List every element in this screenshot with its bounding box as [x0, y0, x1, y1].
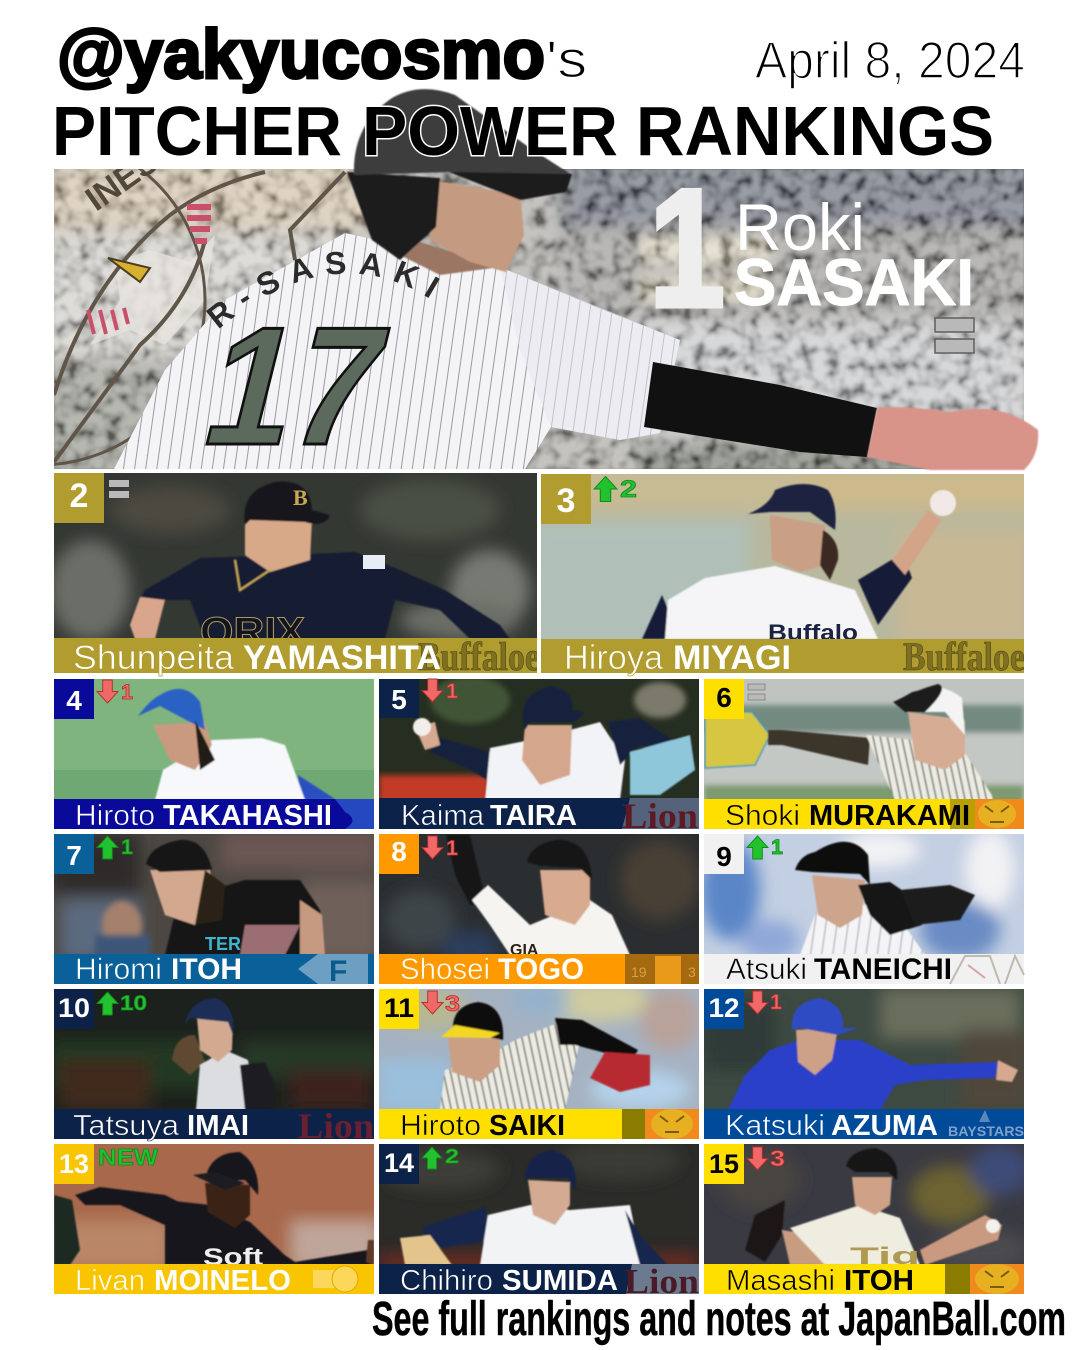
player name: Livan [75, 1265, 145, 1297]
rank change: down 3: 3 [445, 991, 460, 1016]
Marines logo [90, 235, 215, 345]
rank badge [704, 679, 744, 719]
hero photo [54, 142, 1024, 480]
photo: Buffalo [768, 620, 858, 645]
card: rank 6 Shoki Murakami [704, 679, 1024, 832]
photo [54, 1144, 374, 1271]
caption bar [54, 638, 537, 673]
rank change: unchanged [935, 318, 974, 353]
rank badge: 9 [716, 841, 732, 872]
player name [400, 1265, 618, 1297]
caption bar [54, 799, 374, 829]
player name: SUMIDA [502, 1265, 618, 1297]
team logo: F [329, 955, 347, 988]
player name [75, 953, 242, 986]
rank change: down 1 [747, 991, 782, 1014]
player name: YAMASHITA [243, 639, 441, 677]
player name: Hiroya [564, 639, 663, 677]
card: rank 2 Shunpeita Yamashita [50, 473, 553, 679]
name on jersey: R-SASAKI [206, 252, 440, 328]
caption bar [54, 1264, 374, 1294]
player name [726, 953, 952, 986]
photo: ORIX [200, 610, 305, 654]
player name [400, 1110, 565, 1142]
rank change: down 1: 1 [121, 681, 133, 704]
photo [379, 1144, 699, 1264]
rank badge [704, 834, 744, 874]
rank badge [54, 834, 94, 874]
caption bar [704, 1109, 1024, 1139]
photo [379, 989, 699, 1109]
player name [564, 639, 791, 677]
photo [54, 834, 374, 954]
photo [379, 834, 699, 959]
player name [73, 1110, 249, 1142]
rank badge: 12 [708, 993, 740, 1023]
caption bar [704, 799, 1024, 829]
rank badge: 3 [557, 482, 575, 520]
photo: TER [205, 934, 241, 954]
player name [726, 1265, 914, 1297]
rank change: up 2: 2 [445, 1146, 459, 1168]
rank badge: 11 [384, 993, 414, 1023]
player name: Masashi [726, 1265, 835, 1297]
headline POWER: POWER [362, 92, 618, 170]
player name: MOINELO [154, 1265, 291, 1297]
rank badge: 6 [716, 682, 732, 713]
team logo [298, 954, 368, 988]
photo [541, 474, 1024, 645]
player name: Hiroto [400, 1110, 481, 1142]
rank change: up 10 [97, 992, 147, 1015]
team logo [625, 954, 699, 984]
player name: Tatsuya [73, 1110, 180, 1142]
rank change: down 3: 3 [770, 1146, 785, 1171]
card: rank 14 Chihiro Sumida [379, 1140, 699, 1301]
rank badge [541, 474, 591, 524]
team logo [945, 1264, 1024, 1294]
rank change: down 1: 1 [770, 991, 782, 1014]
photo [54, 473, 537, 654]
player name: Hiromi [75, 953, 162, 986]
rank change: new: NEW [98, 1144, 158, 1170]
photo [54, 679, 374, 799]
player name: Chihiro [400, 1265, 493, 1297]
rank change: unchanged [748, 684, 765, 700]
rank badge: 15 [709, 1149, 739, 1179]
player name: MURAKAMI [809, 800, 970, 832]
player name: Kaima [401, 800, 485, 832]
card: rank 15 Masashi Itoh [704, 1144, 1030, 1297]
last name: SASAKI [734, 245, 974, 319]
rank change: down 1 [422, 679, 458, 703]
photo [704, 1144, 1024, 1270]
title: possessive: 's [546, 31, 587, 89]
card: rank 3 Hiroya Miyagi [530, 470, 1040, 679]
rank change: up 10: 10 [120, 992, 147, 1015]
player name: TANEICHI [814, 953, 952, 986]
rank badge [54, 473, 104, 523]
caption bar [379, 954, 699, 984]
rank badge: 14 [384, 1148, 414, 1178]
rank badge [704, 1144, 744, 1184]
rank change: unchanged [109, 480, 129, 498]
player name: Shosei [400, 953, 490, 986]
rank change: down 1 [422, 836, 458, 860]
team logo [335, 799, 374, 829]
hero photo: INES [79, 142, 166, 219]
jersey number 17: 17 [188, 293, 405, 480]
caption bar [54, 954, 374, 984]
player name: AZUMA [831, 1110, 938, 1142]
rank change: up 1: 1 [121, 836, 133, 859]
card: rank 4 Hiroto Takahashi [54, 679, 374, 832]
headline RANKINGS: RANKINGS [636, 92, 994, 170]
player name [401, 800, 577, 832]
rank badge [704, 989, 744, 1029]
player name: ITOH [171, 953, 242, 986]
player name: SAIKI [489, 1110, 565, 1142]
player name: TAKAHASHI [163, 800, 332, 832]
player name: TOGO [498, 953, 584, 986]
jersey [114, 233, 680, 469]
player name: ITOH [844, 1265, 914, 1297]
caption bar [379, 1109, 699, 1139]
rank change: up 1 [747, 836, 783, 859]
player name [73, 639, 441, 677]
photo [704, 989, 1024, 1109]
team logo [950, 799, 1024, 829]
rank badge [54, 1144, 94, 1184]
rank badge: 5 [391, 684, 407, 715]
first name: Roki [735, 190, 865, 264]
rank badge [379, 679, 419, 718]
caption bar [54, 1109, 374, 1139]
team logo [622, 1109, 699, 1139]
rank badge [54, 989, 94, 1029]
player name: Atsuki [726, 953, 807, 986]
player name [75, 800, 332, 832]
rank change: up 2 [422, 1146, 459, 1169]
player head and cap [347, 89, 572, 275]
player name [725, 800, 970, 832]
black arm sleeve [644, 362, 877, 457]
card: rank 12 Katsuki Azuma [704, 989, 1030, 1142]
photo: Tig [850, 1243, 920, 1270]
team logo: Lion [298, 1106, 374, 1146]
photo: Soft [203, 1244, 263, 1271]
headline PITCHER: PITCHER [52, 92, 342, 170]
player name: Katsuki [725, 1110, 825, 1142]
rank badge [54, 679, 94, 719]
rank badge: 10 [58, 993, 90, 1023]
team logo: Lion [622, 796, 698, 836]
caption bar [541, 639, 1024, 673]
rank change: down 1: 1 [446, 680, 458, 703]
card: rank 13 Livan Moinelo [50, 1144, 380, 1297]
hero panel: rank 1 Roki Sasaki [54, 88, 1040, 480]
card: rank 11 Hiroto Saiki [379, 978, 700, 1142]
team logo [950, 956, 1024, 984]
rank badge: 7 [66, 840, 82, 871]
player name: Shunpeita [73, 639, 234, 677]
player name: IMAI [187, 1110, 249, 1142]
player name [725, 1110, 938, 1142]
team logo [313, 1266, 358, 1292]
player name: Hiroto [75, 800, 155, 832]
photo: B [293, 485, 308, 510]
rank number 1: 1 [649, 154, 725, 342]
team logo: Lion [624, 1262, 699, 1301]
rank change: up 1 [97, 836, 133, 859]
caption bar [704, 954, 1024, 984]
rank change: down 1 [97, 680, 133, 704]
rank badge [379, 834, 419, 874]
caption bar [379, 1264, 699, 1294]
photo [704, 834, 1024, 954]
photo: GIA [510, 942, 539, 959]
player name: TAIRA [490, 800, 577, 832]
player name: Shoki [725, 800, 800, 832]
player name [400, 953, 584, 986]
team logo [948, 1110, 1024, 1139]
rank change: down 3 [747, 1146, 785, 1171]
title: handle: @yakyucosmo [57, 15, 545, 93]
team logo: 3 [688, 964, 696, 980]
rank change: up 2: 2 [620, 476, 637, 503]
rank badge: 13 [59, 1149, 89, 1179]
card: rank 5 Kaima Taira [379, 676, 699, 836]
player name: MIYAGI [673, 639, 791, 677]
rank change: up 2 [594, 476, 637, 503]
player name [75, 1265, 291, 1297]
rank badge: 8 [391, 836, 407, 867]
photo [704, 679, 1024, 799]
rank badge: 2 [70, 477, 88, 515]
photo [379, 679, 699, 798]
caption bar [379, 798, 699, 829]
photo [54, 989, 374, 1109]
caption bar [704, 1264, 1024, 1294]
rank change: down 1: 1 [446, 837, 458, 860]
pitching hand [867, 407, 1038, 470]
card: rank 10 Tatsuya Imai [50, 989, 380, 1146]
team logo: BAYSTARS [948, 1123, 1024, 1139]
card: rank 9 Atsuki Taneichi [700, 830, 1024, 986]
rank badge [379, 1144, 419, 1184]
title [52, 15, 1025, 170]
rank badge: 4 [66, 685, 82, 716]
card: rank 7 Hiromi Itoh [50, 830, 380, 988]
card: rank 8 Shosei Togo [379, 834, 700, 986]
rank badge [379, 989, 419, 1029]
rank change: up 1: 1 [771, 836, 783, 859]
rank change: down 3 [422, 991, 460, 1016]
date: April 8, 2024 [755, 32, 1025, 90]
team logo: 19 [631, 964, 647, 980]
